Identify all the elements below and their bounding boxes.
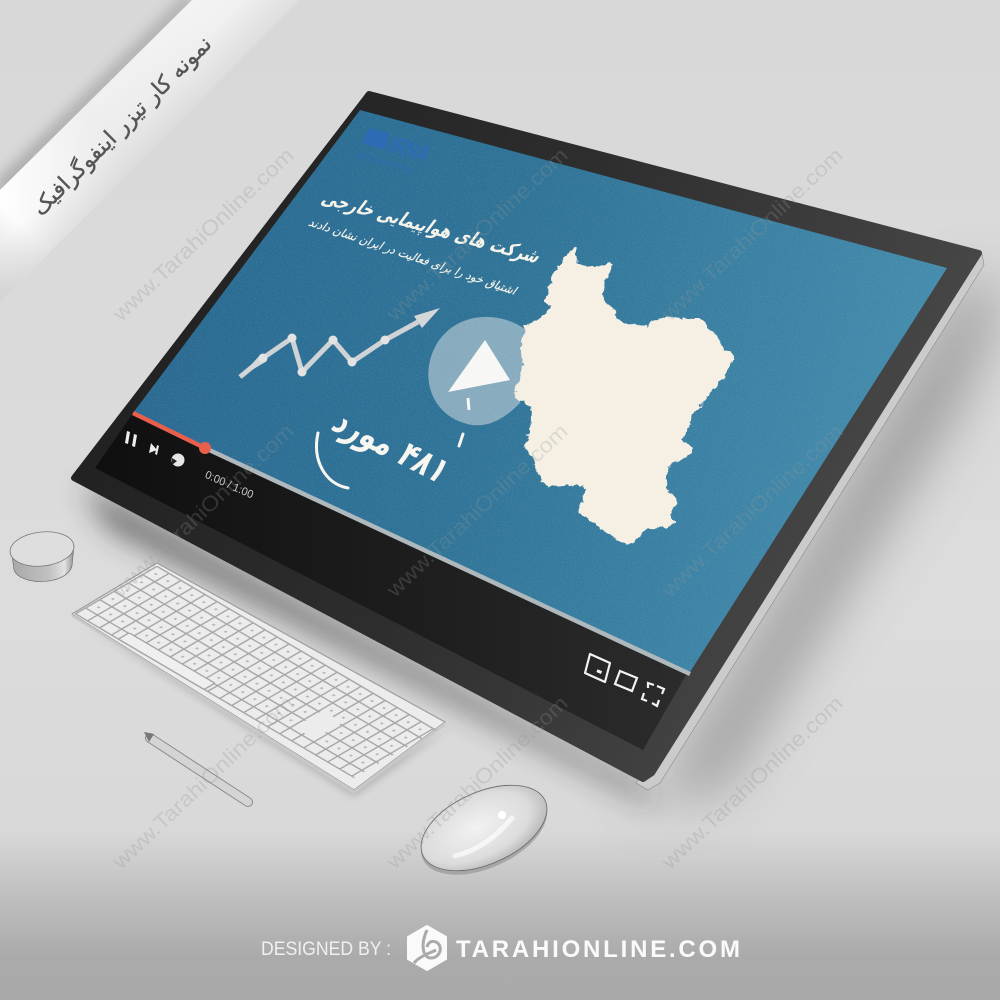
watermarks: www.TarahiOnline.com: [382, 420, 573, 602]
watermarks: www.TarahiOnline.com: [382, 144, 573, 326]
logo: IRNA: INTERNATIONAL: [353, 151, 417, 175]
line chart with arrow: [240, 308, 440, 377]
watermarks: www.TarahiOnline.com: [382, 692, 573, 874]
corner ribbon: [0, 0, 300, 302]
footer credit: [261, 926, 740, 970]
play button: [428, 317, 530, 425]
watermarks: www.TarahiOnline.com: [657, 692, 848, 874]
logo: IRNA: [353, 128, 435, 175]
stat: 481 cases: ۴۸۱ مورد: [324, 402, 460, 490]
icon: brand hexagon: [408, 926, 446, 970]
designed by label: DESIGNED BY :: [261, 938, 391, 960]
icon: pause: [125, 431, 137, 447]
keyboard: [72, 563, 450, 797]
watermarks: www.TarahiOnline.com: [108, 420, 299, 602]
icon: theater mode: [615, 671, 637, 691]
watermarks: www.TarahiOnline.com: [657, 420, 848, 602]
map: [513, 249, 735, 546]
numpad gap: [294, 711, 343, 739]
logo: IRNA: IRNA: [383, 133, 435, 167]
bezel: [74, 94, 979, 779]
monitor shadow on desk: [80, 270, 1000, 805]
icon: next: [149, 443, 159, 455]
watermarks: www.TarahiOnline.com: [108, 692, 299, 874]
silver edge: [636, 254, 984, 790]
progress played: [133, 413, 211, 454]
icon: volume: [172, 454, 184, 466]
subtitle: اشتیاق خود را برای فعالیت در ایران نشان دادند: [305, 216, 521, 298]
screen: blue chalkboard: [130, 105, 950, 675]
monitor: [74, 94, 984, 790]
time label: 0:00 / 1:00: [203, 469, 255, 501]
mouse: [408, 768, 560, 892]
watermarks: www.TarahiOnline.com: [657, 144, 848, 326]
icon: fullscreen: [642, 683, 664, 706]
title: شرکت های هواپیمایی خارجی: [317, 188, 547, 267]
puck: [8, 529, 76, 582]
progress track: [205, 448, 690, 674]
watermarks: [108, 144, 848, 874]
spacebar: [118, 633, 215, 689]
watermarks: www.TarahiOnline.com: [108, 144, 299, 326]
stylus: [144, 732, 248, 802]
brand name: TARAHIONLINE.COM: [456, 936, 740, 963]
player control bar: [95, 413, 690, 750]
ribbon label: نمونه کار تیزر اینفوگرافیک: [27, 31, 217, 221]
icon: miniplayer: [585, 654, 610, 682]
keys: [75, 566, 436, 778]
